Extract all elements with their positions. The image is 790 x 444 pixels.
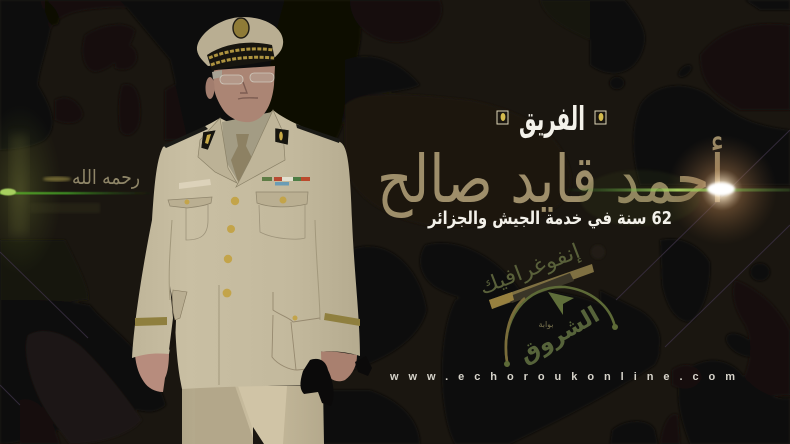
subtitle: 62 سنة في خدمة الجيش والجزائر [427,208,672,229]
cap embroidery [209,49,274,65]
hand right [319,351,357,381]
right breast pocket [256,192,308,207]
cap crown [197,17,283,66]
jacket buttons [184,196,298,320]
right hip pocket [272,292,320,370]
heading: rank [497,99,606,139]
name tag [179,179,211,189]
left lens flare [0,105,150,275]
hand left [135,353,169,392]
logo word: infographic: إنفوغرافيك [476,239,584,300]
left epaulette [163,126,208,148]
heading: name in gold calligraphy: أحمد قايد صالح [377,136,725,218]
heading: rank: الفريق [519,99,585,139]
cap band with gold embroidery [207,43,275,71]
right collar badge mark [279,132,283,140]
nose and mouth shading [238,82,258,99]
right sleeve braid [324,313,360,326]
left lapel [198,118,237,183]
right lens flare [565,135,790,245]
light rays [0,130,790,405]
logo arc [506,287,615,362]
website url: www.echoroukonline.com [389,371,735,383]
logo small word: بوابة [538,320,554,329]
left arm gap shadow [169,286,176,350]
jacket fold lines [169,220,320,385]
tie [231,134,253,182]
jacket [132,110,360,389]
trousers [182,386,324,444]
right collar badge [275,128,289,145]
right lapel [236,110,285,187]
ornament left [497,111,508,124]
left sleeve braid [135,317,167,326]
logo band [489,264,594,309]
glasses [220,73,274,84]
logo: echorouk infographic [476,239,618,368]
ear [206,77,214,99]
grey hair [212,70,222,79]
left breast pocket [168,197,212,208]
left collar badge [201,130,216,150]
ornament right [595,111,606,124]
shirt [222,112,272,180]
cap badge [233,18,249,38]
figure: general in uniform [132,17,372,444]
left collar badge mark [205,134,211,144]
medal ribbons [262,177,310,186]
logo arrow [548,292,574,315]
left hip flap [172,290,187,320]
calligraphy: rahimahu Allah: رحمه الله [72,165,140,189]
black gloves [300,356,372,406]
right epaulette [296,124,340,143]
logo wordmark: الشروق [515,302,604,368]
neck and face [213,66,275,122]
